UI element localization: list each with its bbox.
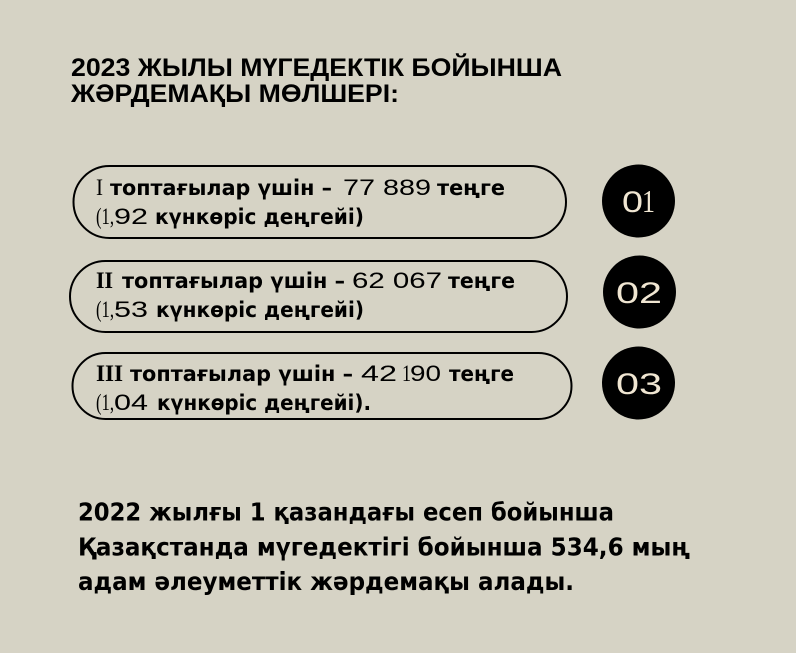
title: 2023 ЖЫЛЫ МҮГЕДЕКТІК БОЙЫНША xyxy=(71,52,562,82)
panel: group III benefit xyxy=(72,353,572,419)
panel: group II benefit: топтағылар үшін – xyxy=(122,269,345,294)
badge: 02 xyxy=(603,256,676,328)
badge: 03 xyxy=(602,346,675,420)
badge: 01: 1 xyxy=(642,183,655,219)
panel: group II benefit: 62 067 xyxy=(352,268,442,293)
panel: group II benefit xyxy=(70,261,567,332)
text block: recipients note: Қазақстанда мүгедектігі бойынша 534,6 мың xyxy=(78,532,690,562)
panel: group III benefit: 1 xyxy=(402,361,411,386)
panel: group I benefit: 77 889 xyxy=(343,175,431,200)
title: ЖӘРДЕМАҚЫ МӨЛШЕРІ: xyxy=(70,80,399,108)
badge: 01 xyxy=(602,164,675,238)
text block: recipients note: адам әлеуметтік жәрдемақы алады. xyxy=(78,567,574,596)
panel: group I benefit xyxy=(74,166,566,238)
panel: group I benefit: 92 xyxy=(114,204,148,229)
badge: 03: 03 xyxy=(616,368,662,401)
panel: group III benefit: 04 xyxy=(114,390,148,415)
panel: group III benefit: топтағылар үшін – xyxy=(130,362,353,387)
panel: group II benefit: теңге xyxy=(448,269,515,294)
text block: recipients note: 2022 жылғы 1 қазандағы есеп бойынша xyxy=(78,498,614,526)
text block: recipients note xyxy=(78,498,690,596)
panel: group III benefit: теңге xyxy=(449,362,514,387)
panel: group I benefit: топтағылар үшін – xyxy=(110,176,332,201)
panel: group I benefit: I xyxy=(96,175,103,200)
title xyxy=(70,52,562,108)
panel: group I benefit: (1, xyxy=(96,204,114,229)
panel: group III benefit: (1, xyxy=(96,390,114,415)
panel: group I benefit: күнкөріс деңгейі) xyxy=(155,205,364,230)
panel: group II benefit: 53 xyxy=(114,297,148,322)
panel: group II benefit: (1, xyxy=(96,297,114,322)
badge: 02: 02 xyxy=(616,277,662,310)
panel: group III benefit: III xyxy=(96,361,123,386)
badge: 01: 0 xyxy=(622,186,643,219)
panel: group III benefit: 42 xyxy=(361,361,397,386)
panel: group II benefit: II xyxy=(96,268,113,293)
panel: group II benefit: күнкөріс деңгейі) xyxy=(156,298,364,323)
panel: group I benefit: теңге xyxy=(437,176,505,201)
panel: group III benefit: 90 xyxy=(410,361,441,386)
panel: group III benefit: күнкөріс деңгейі). xyxy=(157,391,371,416)
